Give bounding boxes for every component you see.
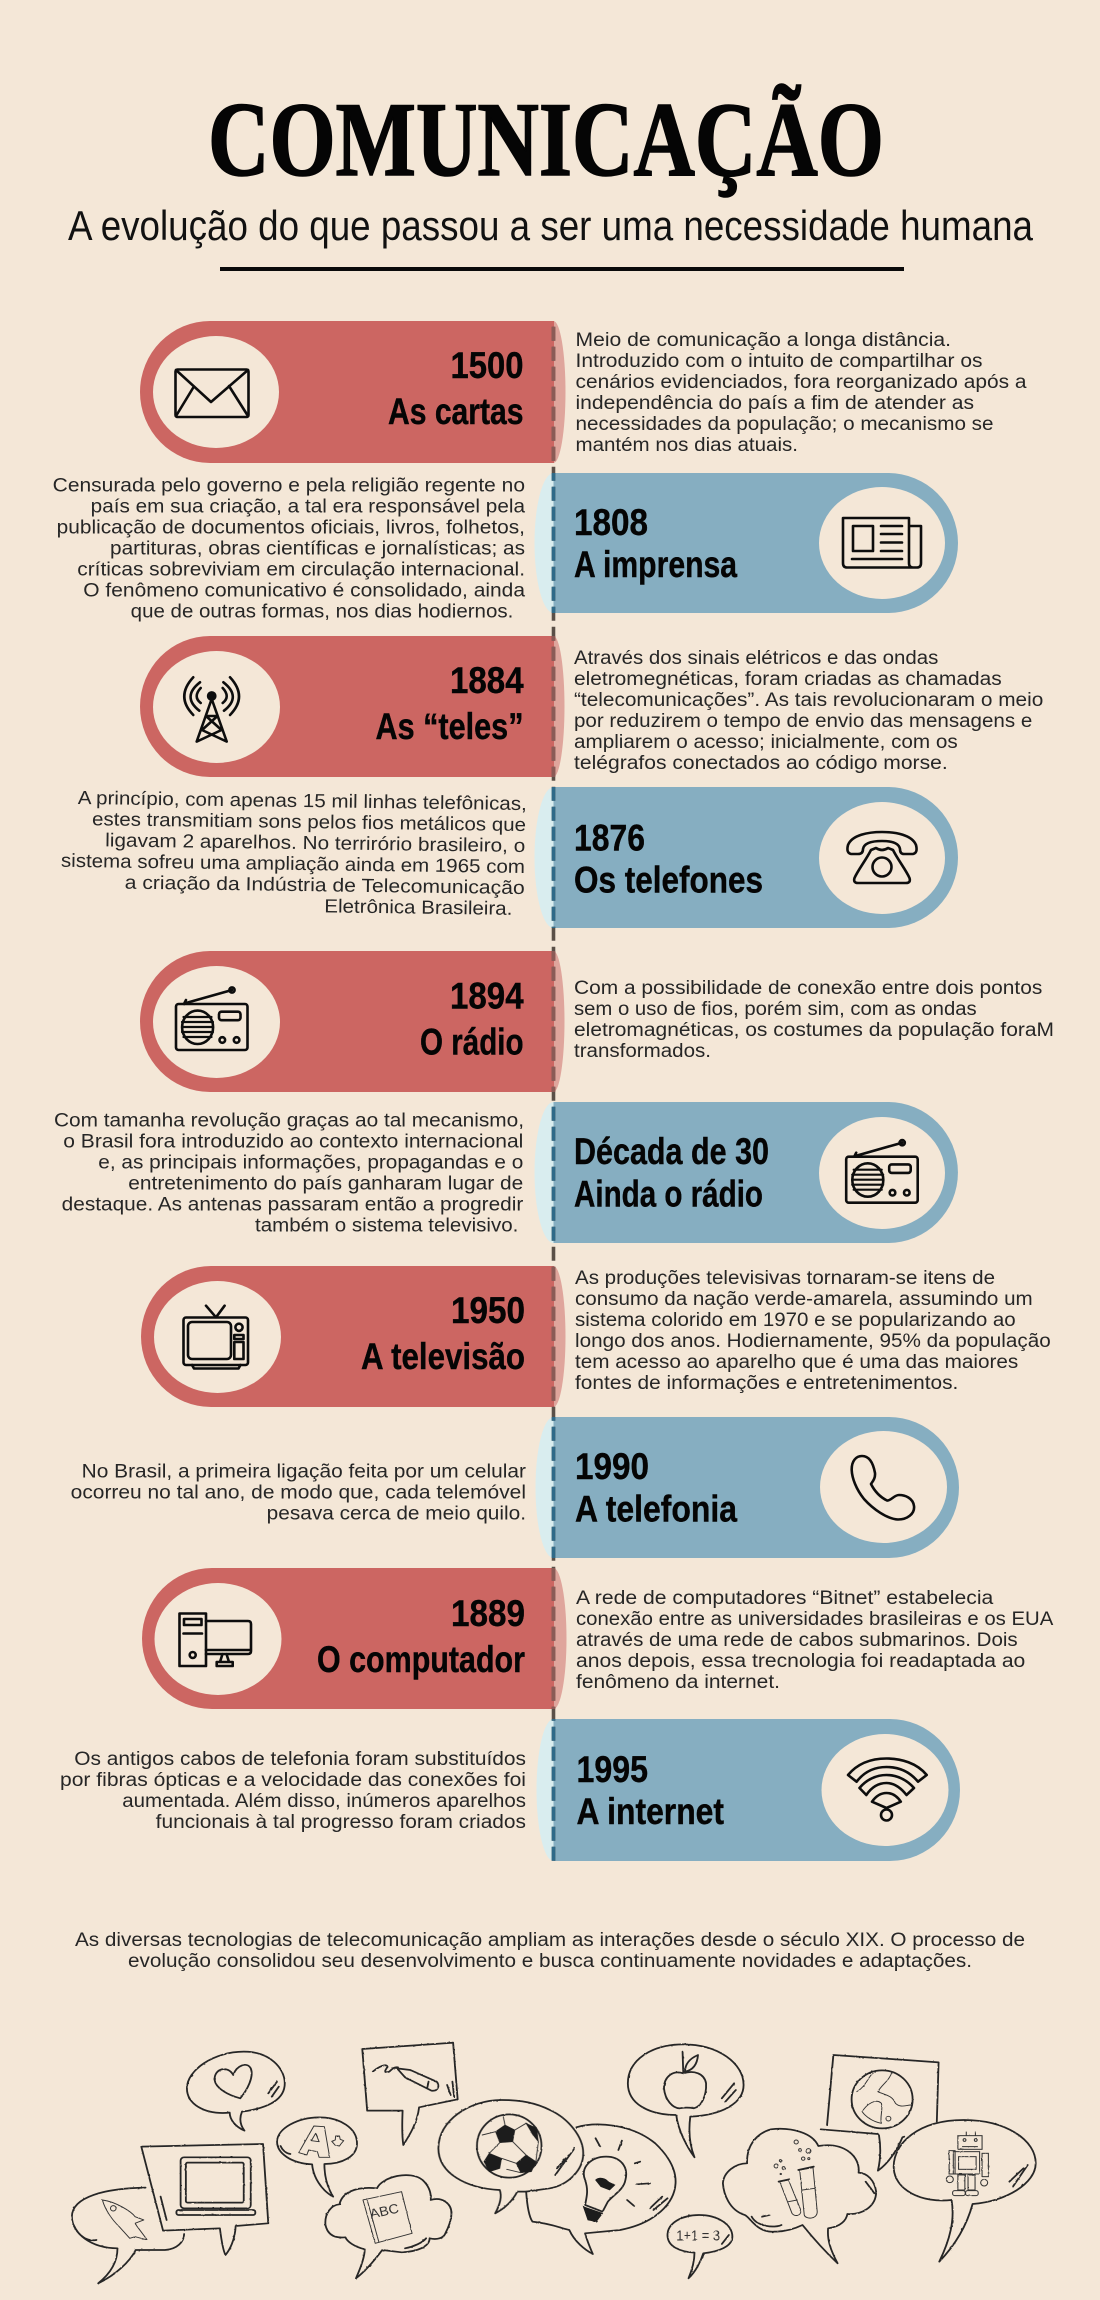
- panel: 1884 as teles: 1884: [450, 660, 524, 701]
- icon: wifi: [848, 1758, 927, 1820]
- text: decada: o Brasil fora introduzido ao contexto internacional: [63, 1132, 523, 1153]
- bubble: laptop: [141, 2144, 268, 2255]
- panel: 1500 as cartas: As cartas: [388, 391, 524, 432]
- text: telefones: [60, 788, 527, 920]
- timeline dashed line: [552, 327, 555, 1862]
- text: imprensa: publicação de documentos oficiais, livros, folhetos,: [57, 518, 525, 539]
- conclusion text: [75, 1930, 1025, 1972]
- bubble: soccer ball: [438, 2100, 583, 2213]
- panel: 1894 o radio: [140, 951, 564, 1092]
- bubble: rocket: [72, 2188, 184, 2283]
- text: computador: [576, 1588, 1054, 1693]
- icon: radio: [176, 987, 248, 1050]
- text: teles: “telecomunicações”. As tais revolucionaram o meio: [574, 690, 1043, 711]
- bubble: heart: [187, 2052, 285, 2131]
- bubble: pencil: [362, 2043, 458, 2145]
- text: telefonia: pesava cerca de meio quilo.: [267, 1504, 526, 1525]
- bubble: globe: [821, 2055, 939, 2171]
- bubble: ABC book: ABC: [368, 2201, 401, 2221]
- text: radio: [574, 978, 1054, 1062]
- text: internet: [60, 1749, 526, 1833]
- text: radio: transformados.: [574, 1041, 711, 1062]
- panel: 1995 a internet: [536, 1719, 960, 1861]
- text: televisao: consumo da nação verde-amarela, assumindo um: [575, 1289, 1033, 1310]
- text: televisao: tem acesso ao aparelho que é uma das maiores: [575, 1352, 1018, 1373]
- panel: 1808 a imprensa: A imprensa: [574, 544, 737, 585]
- text: decada: Com tamanha revolução graças ao tal mecanismo,: [54, 1111, 524, 1132]
- panel: 1500 as cartas: [140, 321, 566, 463]
- bubble: light bulb: [526, 2124, 676, 2254]
- text: cartas: mantém nos dias atuais.: [576, 435, 798, 456]
- text: cartas: Introduzido com o intuito de compartilhar os: [576, 351, 982, 372]
- text: computador: anos depois, essa trecnologia foi readaptada ao: [576, 1651, 1025, 1672]
- text: telefones: Eletrônica Brasileira.: [324, 896, 512, 920]
- text: radio: Com a possibilidade de conexão entre dois pontos: [574, 978, 1042, 999]
- text: teles: Através dos sinais elétricos e das ondas: [574, 648, 938, 669]
- panel: 1990 a telefonia: 1990: [575, 1446, 649, 1487]
- text: imprensa: país em sua criação, a tal era responsável pela: [91, 497, 525, 518]
- panel: 1950 a televisao: [141, 1266, 566, 1407]
- panel: 1990 a telefonia: A telefonia: [575, 1489, 737, 1530]
- icon: radio: [846, 1140, 918, 1203]
- title underline: [220, 267, 904, 271]
- text: telefonia: ocorreu no tal ano, de modo que, cada telemóvel: [71, 1483, 526, 1504]
- text: decada: destaque. As antenas passaram então a progredir: [62, 1195, 524, 1216]
- text: teles: [574, 648, 1043, 774]
- text: decada: [54, 1111, 524, 1237]
- icon: envelope: [176, 370, 248, 417]
- panel: 1950 a televisao: 1950: [451, 1290, 525, 1331]
- icon: rotary telephone: [847, 832, 917, 883]
- text: imprensa: O fenômeno comunicativo é consolidado, ainda: [83, 581, 525, 602]
- text: computador: conexão entre as universidades brasileiras e os EUA: [576, 1609, 1054, 1630]
- text: internet: por fibras ópticas e a velocidade das conexões foi: [60, 1770, 526, 1791]
- text: teles: eletromegnéticas, foram criadas as chamadas: [574, 669, 1002, 690]
- text: computador: fenômeno da internet.: [576, 1672, 780, 1693]
- panel: 1889 o computador: [142, 1568, 566, 1709]
- doodles: speech bubbles left: [72, 2043, 583, 2283]
- panel: 1500 as cartas: 1500: [450, 345, 524, 386]
- bubble: robot: [894, 2120, 1036, 2262]
- panel: 1889 o computador: 1889: [451, 1593, 525, 1634]
- text: teles: ampliarem o acesso; inicialmente, com os: [574, 732, 958, 753]
- text: telefones: a criação da Indústria de Telecomunicação: [125, 873, 525, 899]
- doodles: speech bubbles right: [526, 2044, 1036, 2278]
- text: telefonia: [71, 1462, 527, 1525]
- panel: decada de 30: Ainda o rádio: [574, 1174, 763, 1215]
- conclusion text: As diversas tecnologias de telecomunicação ampliam as interações desde o século XIX. O processo de: [75, 1930, 1025, 1951]
- icon: newspaper: [843, 518, 921, 568]
- panel: 1894 o radio: O rádio: [420, 1022, 524, 1063]
- bubble: grade A plus: [277, 2117, 357, 2197]
- conclusion text: evolução consolidou seu desenvolvimento e busca continuamente novidades e adaptações.: [128, 1951, 972, 1972]
- text: internet: Os antigos cabos de telefonia foram substituídos: [74, 1749, 526, 1770]
- icon: phone handset: [852, 1456, 914, 1520]
- text: cartas: necessidades da população; o mecanismo se: [576, 414, 994, 435]
- text: decada: e, as principais informações, propagandas e o: [98, 1153, 523, 1174]
- text: computador: através de uma rede de cabos submarinos. Dois: [576, 1630, 1018, 1651]
- text: computador: A rede de computadores “Bitnet” estabelecia: [576, 1588, 994, 1609]
- text: cartas: [576, 330, 1027, 456]
- text: telefones: estes transmitiam sons pelos fios metálicos que: [92, 809, 526, 836]
- panel: 1876 os telefones: Os telefones: [574, 860, 763, 901]
- panel: 1884 as teles: [140, 636, 564, 777]
- text: cartas: Meio de comunicação a longa distância.: [576, 330, 951, 351]
- panel: 1995 a internet: 1995: [576, 1749, 648, 1790]
- text: televisao: sistema colorido em 1970 e se popularizando ao: [575, 1310, 1016, 1331]
- panel: 1808 a imprensa: [534, 473, 958, 613]
- panel: decada de 30: Década de 30: [574, 1131, 769, 1172]
- bubble: test tubes: [723, 2129, 876, 2263]
- bubble: math: [667, 2215, 732, 2278]
- text: telefones: sistema sofreu uma ampliação ainda em 1965 com: [61, 851, 525, 878]
- icon: television: [184, 1306, 248, 1368]
- text: imprensa: críticas sobreviviam em circulação internacional.: [77, 560, 525, 581]
- text: imprensa: Censurada pelo governo e pela religião regente no: [53, 476, 525, 497]
- panel: 1876 os telefones: [534, 787, 958, 928]
- text: decada: entretenimento do país ganharam lugar de: [128, 1174, 523, 1195]
- panel: 1950 a televisao: A televisão: [361, 1336, 525, 1377]
- text: imprensa: partituras, obras científicas e jornalísticas; as: [110, 539, 525, 560]
- panel: 1995 a internet: A internet: [576, 1791, 724, 1832]
- panel: 1990 a telefonia: [536, 1417, 959, 1558]
- text: cartas: independência do país a fim de atender as: [576, 393, 974, 414]
- title: COMUNICAÇÃO: [208, 81, 884, 198]
- text: radio: sem o uso de fios, porém sim, com as ondas: [574, 999, 977, 1020]
- panel: 1894 o radio: 1894: [450, 976, 524, 1017]
- text: radio: eletromagnéticas, os costumes da população foraM: [574, 1020, 1054, 1041]
- text: imprensa: que de outras formas, nos dias hodiernos.: [131, 602, 513, 623]
- text: telefones: ligavam 2 aparelhos. No terrirório brasileiro, o: [105, 830, 525, 857]
- panel: 1876 os telefones: 1876: [574, 818, 645, 859]
- text: televisao: As produções televisivas tornaram-se itens de: [575, 1268, 995, 1289]
- text: televisao: longo dos anos. Hodiernamente, 95% da população: [575, 1331, 1051, 1352]
- text: telefonia: No Brasil, a primeira ligação feita por um celular: [82, 1462, 527, 1483]
- panel: 1808 a imprensa: 1808: [574, 502, 648, 543]
- bubble: ABC book: [325, 2175, 451, 2278]
- text: internet: funcionais à tal progresso foram criados: [156, 1812, 526, 1833]
- text: imprensa: [53, 476, 525, 623]
- text: decada: também o sistema televisivo.: [255, 1216, 518, 1237]
- text: teles: por reduzirem o tempo de envio das mensagens e: [574, 711, 1032, 732]
- panel: 1889 o computador: O computador: [317, 1639, 525, 1680]
- text: televisao: fontes de informações e entretenimentos.: [575, 1373, 958, 1394]
- bubble: math: 1+1 = 3: [676, 2228, 720, 2245]
- text: teles: telégrafos conectados ao código morse.: [574, 753, 948, 774]
- text: telefones: A princípio, com apenas 15 mil linhas telefônicas,: [78, 788, 527, 815]
- text: televisao: [575, 1268, 1051, 1394]
- panel: decada de 30: [535, 1102, 958, 1243]
- text: internet: aumentada. Além disso, inúmeros aparelhos: [122, 1791, 526, 1812]
- panel: 1884 as teles: As “teles”: [376, 706, 524, 747]
- icon: antenna tower: [184, 677, 239, 742]
- icon: desktop computer: [180, 1614, 251, 1666]
- text: cartas: cenários evidenciados, fora reorganizado após a: [576, 372, 1027, 393]
- bubble: apple: [628, 2044, 744, 2157]
